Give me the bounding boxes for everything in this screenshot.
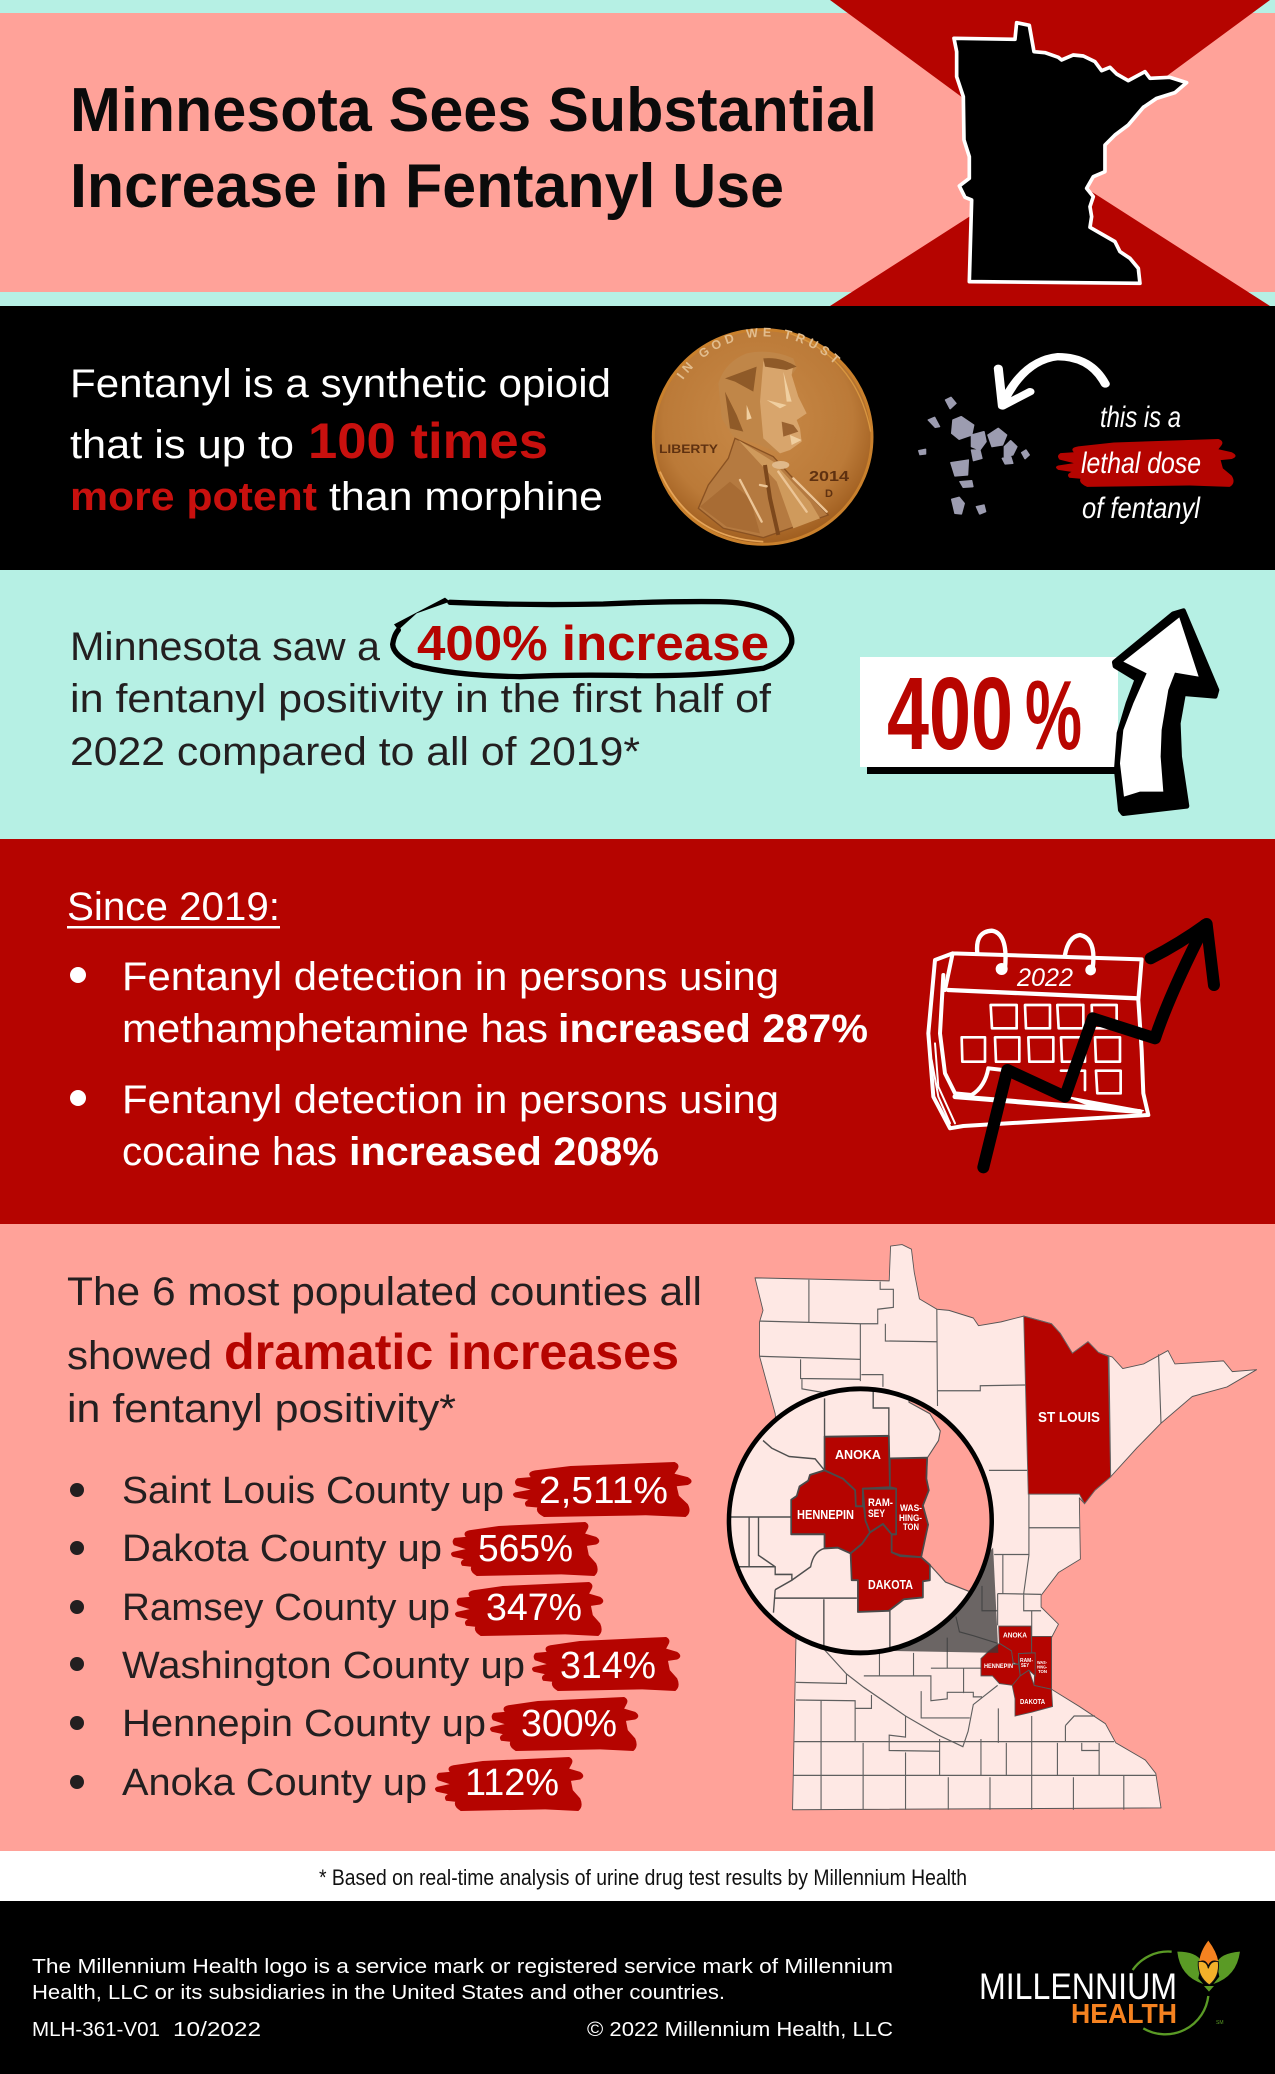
list item: washington: Washington County up [122,1645,525,1687]
list item: ramsey: Ramsey County up [122,1587,450,1629]
list item: anoka: Anoka County up [122,1762,427,1804]
logo: millennium health [979,1941,1240,2034]
panel: source note: * Based on real-time analysis of urine drug test results by Millennium Health [319,1865,967,1890]
legal text [32,1956,893,2041]
icon: calendar with rising arrow: 2022 [1016,964,1073,992]
text: potency statement: 100 times [308,413,548,469]
text: counties statement: The 6 most populated counties all [67,1270,702,1314]
legal text: © 2022 Millennium Health, LLC [587,2019,893,2041]
list item: washington [70,1637,680,1691]
icon: minnesota silhouette [954,23,1187,283]
list item: ramsey [70,1582,603,1636]
map labels: ANOKA [1003,1632,1027,1640]
map labels: HING- [899,1513,922,1524]
icon: calendar with rising arrow [928,924,1214,1167]
magnifier lens [729,1375,998,1653]
panel: source note [0,1851,1275,1901]
map labels: RAM- [868,1497,893,1509]
list item: anoka [70,1757,583,1811]
bullet: methamphetamine [70,955,868,1051]
coin inscriptions: 2014 [809,468,850,485]
legal text: 10/2022 [173,2019,261,2041]
text: increase statement: 2022 compared to all of 2019* [70,730,640,774]
map labels: HENNEPIN [984,1663,1013,1670]
text: increase statement: in fentanyl positivity in the first half of [70,677,772,721]
icon: fentanyl powder [919,397,1029,514]
panel: title banner [0,0,1275,306]
text: potency statement [70,362,611,519]
legal text: MLH-361-V01 [32,2019,160,2041]
list item: hennepin: 300% [521,1703,617,1745]
text: potency statement: Fentanyl is a synthetic opioid [70,362,611,406]
map labels: TON [1038,1669,1047,1674]
map labels: SEY [868,1508,886,1520]
county: st louis [1024,1316,1111,1504]
map labels: TON [903,1522,919,1533]
text: potency statement: that is up to [70,423,294,467]
map labels: SEY [1021,1663,1030,1669]
bullet: cocaine: increased 208% [349,1130,659,1174]
coin inscriptions: IN GOD WE TRUST [676,328,840,380]
map labels: HING- [1037,1664,1047,1670]
bullet: cocaine: cocaine has [122,1130,337,1174]
list item: dakota: Dakota County up [122,1528,442,1570]
coin inscriptions: LIBERTY [659,442,718,456]
map labels: ANOKA [835,1447,882,1462]
logo: millennium health: SM [1216,2020,1224,2026]
callout: 400 percent box: % [1025,660,1082,770]
panel: since 2019 [0,839,1275,1224]
map labels: HENNEPIN [797,1508,854,1522]
text: counties statement: in fentanyl positivity* [67,1387,456,1431]
logo: millennium health: MILLENNIUM [979,1966,1177,2007]
map labels: ST LOUIS [1038,1409,1100,1426]
bullet: methamphetamine: methamphetamine has [122,1007,548,1051]
map labels: WAS- [1037,1660,1047,1665]
list item: dakota [70,1522,599,1576]
bullet: cocaine [70,1078,779,1174]
list item: hennepin [70,1697,638,1751]
map labels [797,1409,1100,1706]
text: increase statement: 400% increase [417,617,769,671]
list item: ramsey: 347% [486,1587,582,1629]
callout: lethal dose: lethal dose [1081,447,1201,480]
map labels: RAM- [1020,1658,1033,1664]
callout: 400 percent box [860,656,1118,774]
red x background [830,0,1270,306]
list item: washington: 314% [560,1645,656,1687]
title [70,76,877,221]
text: counties statement [67,1270,702,1431]
text: potency statement: than morphine [329,475,603,519]
legal text: The Millennium Health logo is a service mark or registered service mark of Millennium [32,1956,893,1978]
heading: Since 2019: [67,885,280,929]
zoom wedge [893,1548,998,1653]
title: Minnesota Sees Substantial [70,76,877,145]
bullet: cocaine: Fentanyl detection in persons using [122,1078,779,1122]
text: counties statement: dramatic increases [224,1324,679,1380]
panel: 400 percent increase [0,570,1275,839]
arrow: up [1115,611,1217,813]
bullet: methamphetamine: Fentanyl detection in persons using [122,955,779,999]
counties: metro [981,1626,1053,1716]
list item: hennepin: Hennepin County up [122,1703,486,1745]
map labels: WAS- [900,1503,922,1514]
legal text: Health, LLC or its subsidiaries in the United States and other countries. [32,1982,725,2004]
text: increase statement [70,617,772,774]
map: minnesota counties [729,1245,1257,1810]
list item: dakota: 565% [478,1528,573,1570]
state outline [755,1245,1257,1810]
text: counties statement: showed [67,1334,212,1378]
list item: saint louis: Saint Louis County up [122,1470,504,1512]
arrow: points to powder [998,357,1105,406]
icon: penny [652,328,874,546]
panel: footer [0,1901,1275,2074]
hand drawn ellipse [393,598,792,677]
list item: saint louis [70,1462,692,1517]
callout: 400 percent box: 400 [887,656,1013,771]
text: increase statement: Minnesota saw a [70,625,381,669]
coin inscriptions: D [825,488,833,500]
coin inscriptions [659,328,850,500]
callout: lethal dose: of fentanyl [1082,492,1201,525]
list: county increases [70,1462,692,1811]
callout: lethal dose: this is a [1100,401,1181,434]
callout: lethal dose [1056,401,1236,525]
title: Increase in Fentanyl Use [70,152,784,221]
bullet: methamphetamine: increased 287% [558,1007,868,1051]
map labels: DAKOTA [868,1578,913,1592]
text: potency statement: more potent [70,475,317,519]
map labels: DAKOTA [1020,1699,1045,1706]
panel: synthetic opioid [0,306,1275,570]
list item: saint louis: 2,511% [539,1470,668,1512]
panel: counties [0,1224,1275,1851]
logo: millennium health: HEALTH [1071,1998,1177,2029]
list item: anoka: 112% [465,1762,559,1804]
